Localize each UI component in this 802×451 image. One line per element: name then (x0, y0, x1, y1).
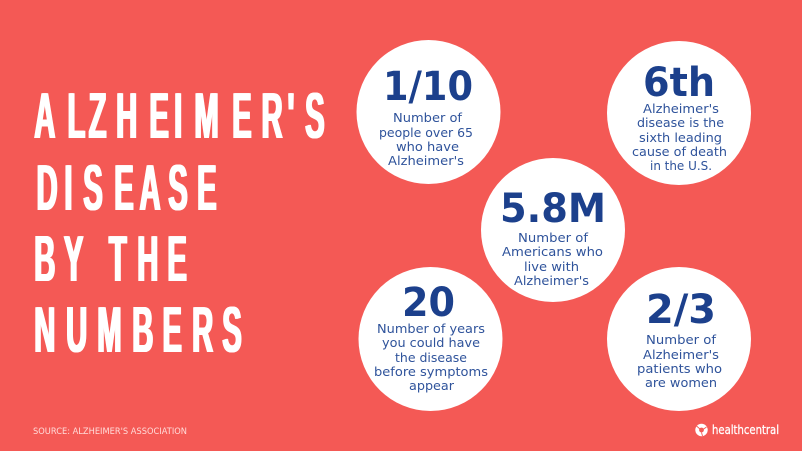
title (34, 79, 325, 366)
stat: 6th (607, 41, 751, 185)
description: disease is the (637, 115, 724, 130)
description (374, 321, 488, 393)
description: Alzheimer's (643, 101, 719, 116)
wordmark: healthcentral (712, 422, 779, 437)
icon: logo mark (695, 424, 708, 436)
source note: SOURCE: ALZHEIMER'S ASSOCIATION (33, 427, 187, 437)
description: Number of (393, 110, 463, 125)
description: in the U.S. (650, 158, 712, 173)
description (632, 101, 727, 173)
circle background (607, 267, 751, 411)
description: before symptoms (374, 364, 488, 379)
title: ALZHEIMER'S (34, 79, 325, 152)
description: Number of (646, 332, 717, 347)
circle background (607, 41, 751, 185)
title: BY THE (34, 222, 187, 295)
circle background (481, 158, 625, 302)
stat: 20 (358, 267, 502, 411)
description: people over 65 (379, 125, 473, 140)
number: 20 (402, 280, 455, 326)
description: you could have (382, 335, 480, 350)
description: Number of (518, 230, 589, 245)
description: Alzheimer's (643, 347, 719, 362)
stat: 2/3 (607, 267, 751, 411)
circle background (356, 40, 500, 184)
description: Americans who (502, 244, 603, 259)
title: DISEASE (36, 151, 217, 224)
description: cause of death (632, 144, 727, 159)
description: patients who (637, 361, 722, 376)
number: 2/3 (646, 287, 716, 333)
logo: healthcentral (695, 422, 779, 437)
description (502, 230, 603, 288)
description: Alzheimer's (514, 273, 589, 288)
stat: 5.8M (481, 158, 625, 302)
circle background (358, 267, 502, 411)
description: are women (645, 375, 717, 390)
description: live with (524, 259, 579, 274)
description (379, 110, 473, 168)
number: 1/10 (383, 64, 473, 110)
description (637, 332, 722, 390)
description: the disease (395, 350, 467, 365)
title: NUMBERS (34, 293, 242, 366)
description: appear (409, 378, 455, 393)
description: Alzheimer's (388, 153, 464, 168)
description: who have (396, 139, 459, 154)
number: 6th (643, 60, 715, 106)
description: sixth leading (639, 130, 722, 145)
description: Number of years (377, 321, 485, 336)
stat: 1/10 (356, 40, 500, 184)
number: 5.8M (500, 186, 606, 232)
